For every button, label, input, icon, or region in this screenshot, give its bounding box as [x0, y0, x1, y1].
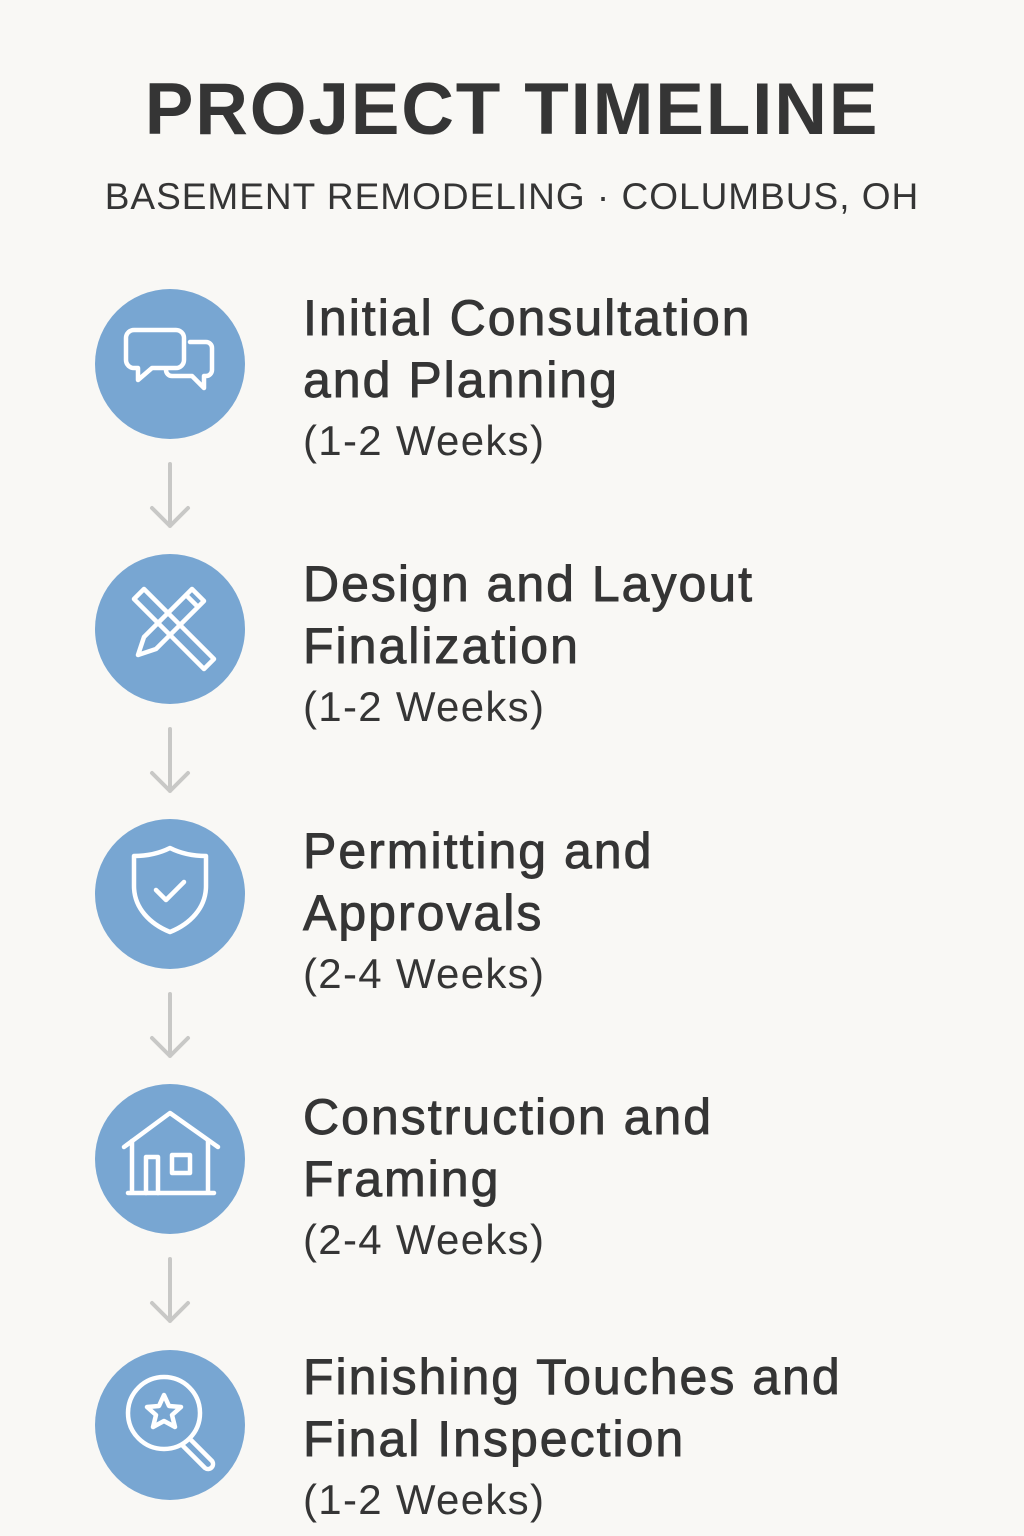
icon: magnifier with star [95, 1350, 245, 1500]
step 2 text: (1-2 Weeks) [303, 683, 545, 730]
step 4 text: (2-4 Weeks) [303, 1216, 545, 1263]
step 1 text [303, 290, 752, 464]
icon: shield check [95, 819, 245, 969]
arrow 2 [152, 729, 188, 791]
step 2 text [303, 556, 754, 730]
title: PROJECT TIMELINE [145, 69, 879, 150]
step 4 text [303, 1089, 713, 1263]
step 5 text: Finishing Touches and [303, 1349, 842, 1405]
step 1 text: Initial Consultation [303, 290, 752, 346]
step 5 text [303, 1349, 842, 1523]
step 1 text: (1-2 Weeks) [303, 417, 545, 464]
step 5 text: (1-2 Weeks) [303, 1476, 545, 1523]
step 4 text: Framing [303, 1151, 500, 1207]
step 1 text: and Planning [303, 352, 619, 408]
step 5 text: Final Inspection [303, 1411, 685, 1467]
icon: pencil and ruler [95, 554, 245, 704]
step 3 text: Permitting and [303, 823, 653, 879]
step 2 text: Design and Layout [303, 556, 754, 612]
step 3 text: Approvals [303, 885, 543, 941]
arrow 3 [152, 994, 188, 1056]
step 3 text [302, 823, 653, 997]
icon: chat bubbles [95, 289, 245, 439]
icon: house [95, 1084, 245, 1234]
arrow 1 [152, 464, 188, 526]
step 4 text: Construction and [303, 1089, 713, 1145]
step 3 text: (2-4 Weeks) [303, 950, 545, 997]
step 2 text: Finalization [303, 618, 580, 674]
subtitle: BASEMENT REMODELING · COLUMBUS, OH [105, 176, 919, 217]
arrow 4 [152, 1259, 188, 1321]
